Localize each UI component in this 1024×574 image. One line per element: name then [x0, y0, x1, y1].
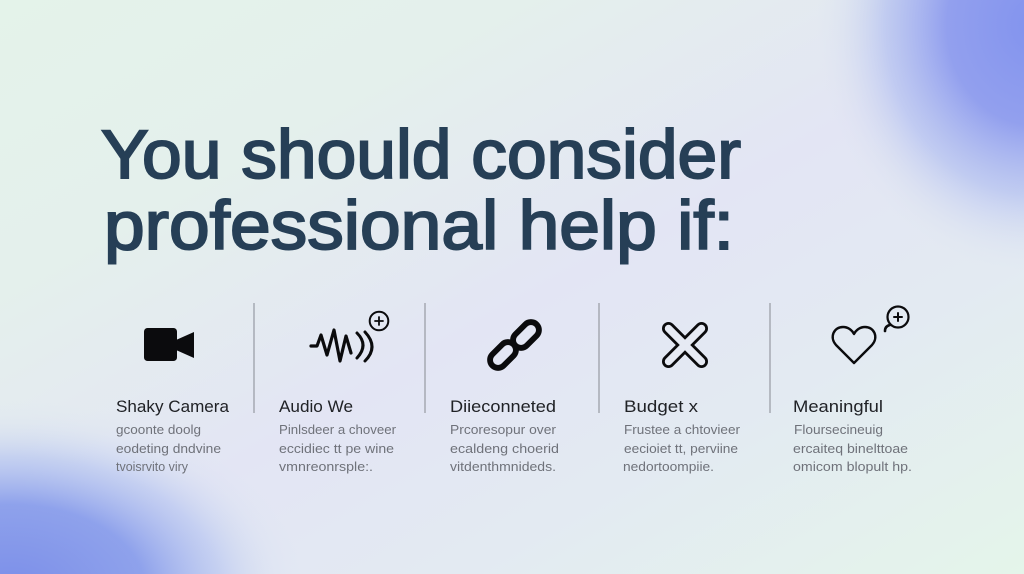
- description: meaningful: omicom blopult hp.: [793, 459, 912, 474]
- description: budget: nedortoompiie.: [623, 459, 714, 474]
- description: budget: Frustee a chtovieer: [624, 422, 741, 437]
- description: disconnected: vitdenthmnideds.: [450, 459, 556, 474]
- description: audio: [279, 422, 397, 474]
- description: audio: Pinlsdeer a choveer: [279, 422, 397, 437]
- panel: budget: [623, 328, 741, 474]
- panel: meaningful: [793, 306, 912, 474]
- panel: disconnected: [450, 319, 559, 474]
- heading: audio: Audio We: [279, 397, 353, 416]
- description: meaningful: ercaiteq binelttoae: [793, 441, 908, 456]
- description: shaky camera: tvoisrvito viry: [116, 459, 188, 474]
- icon: chain link: [487, 319, 542, 371]
- divider lines: [254, 303, 770, 413]
- icon: sound wave with plus: [311, 312, 388, 361]
- panel: audio: [279, 312, 397, 474]
- title: [101, 116, 741, 264]
- description: shaky camera: [116, 422, 221, 474]
- title: professional help if:: [104, 187, 734, 264]
- heading: budget: Budget x: [624, 397, 699, 416]
- title: You should consider: [101, 116, 741, 193]
- icon: outlined x: [668, 328, 702, 362]
- description: shaky camera: gcoonte doolg: [116, 422, 201, 437]
- description: shaky camera: eodeting dndvine: [116, 441, 221, 456]
- heading: meaningful: Meaningful: [793, 397, 883, 416]
- icon: video camera: [144, 328, 194, 361]
- icon: heart with magnifier plus: [833, 306, 908, 363]
- description: meaningful: Flourseсineuig: [794, 422, 883, 437]
- heading: disconnected: Diieconneted: [450, 397, 556, 416]
- description: meaningful: [793, 422, 912, 474]
- description: disconnected: ecaldeng choerid: [450, 441, 559, 456]
- description: audio: vmnreonrsple:.: [279, 459, 373, 474]
- description: budget: eecioiet tt, perviine: [624, 441, 738, 456]
- description: disconnected: Prcoresopur over: [450, 422, 557, 437]
- panel: shaky camera: [116, 328, 230, 474]
- description: disconnected: [450, 422, 559, 474]
- description: audio: eccidiec tt pe wine: [279, 441, 394, 456]
- description: budget: [623, 422, 741, 474]
- heading: shaky camera: Shaky Camera: [116, 397, 230, 416]
